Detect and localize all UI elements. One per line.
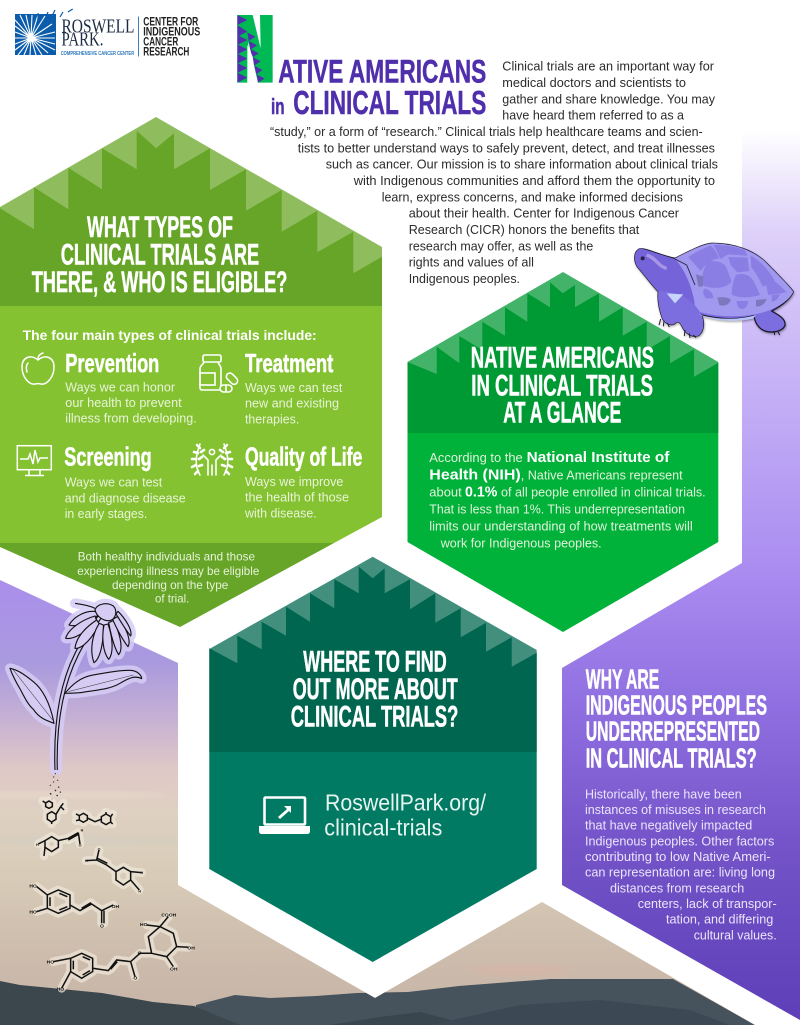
- treatment block: therapies.: [245, 411, 299, 426]
- logo: Roswell Park: [15, 9, 139, 57]
- text block: introduction: learn, express concerns, and make informed decisions: [382, 189, 683, 204]
- panel: sunset landscape photo: [0, 580, 755, 1025]
- icon: sunburst: [15, 9, 73, 55]
- treatment block: [245, 348, 343, 426]
- illustration: molecules: OH: [112, 904, 120, 910]
- body text: National Institute of: [527, 449, 670, 466]
- body text: , Native Americans represent: [521, 467, 683, 482]
- screening block: in early stages.: [65, 506, 147, 521]
- text block: introduction: about their health. Center for Indigenous Cancer: [409, 206, 680, 221]
- heading: [471, 342, 654, 430]
- heading: NATIVE AMERICANS: [471, 342, 654, 375]
- body text: [429, 449, 706, 551]
- heading: CLINICAL TRIALS ARE: [61, 238, 259, 272]
- illustration: molecules: HO: [29, 884, 37, 890]
- illustration: molecules: O: [138, 951, 142, 957]
- title: [271, 53, 486, 122]
- text block: introduction: such as cancer. Our mission is to share information about clinical trials: [326, 157, 718, 172]
- illustration: molecules: OH: [187, 945, 195, 951]
- heading: CLINICAL TRIALS?: [291, 701, 458, 734]
- heading: why underrepresented: [586, 663, 767, 773]
- panel: at a glance: [408, 272, 718, 632]
- illustration: molecules: H: [81, 828, 84, 832]
- title: in: [271, 94, 284, 119]
- illustration: molecules: O: [133, 975, 137, 981]
- text block: introduction: medical doctors and scientists to: [502, 75, 686, 90]
- icon: laptop: [259, 798, 310, 834]
- illustration: molecules: O: [79, 844, 82, 848]
- heading: THERE, & WHO IS ELIGIBLE?: [32, 266, 287, 299]
- text block: introduction: [270, 59, 718, 286]
- illustration: molecules: HO: [140, 922, 148, 928]
- eligibility note: of trial.: [155, 592, 189, 606]
- illustration: molecules: OH: [170, 967, 178, 973]
- illustration: molecules: H: [141, 871, 144, 875]
- prevention block: Prevention: [65, 348, 159, 378]
- body text: about: [429, 485, 462, 500]
- title: CLINICAL TRIALS: [293, 85, 486, 122]
- screening block: and diagnose disease: [65, 490, 186, 505]
- illustration: coneflower: [10, 603, 142, 799]
- text block: why underrepresented: contributing to low Native Ameri-: [585, 849, 771, 864]
- body text: limits our understanding of how treatments will: [429, 519, 693, 534]
- heading: IN CLINICAL TRIALS: [471, 369, 653, 402]
- logo text: Center for Indigenous Cancer Research: CANCER: [143, 36, 179, 48]
- link text: clinical-trials: [324, 815, 442, 841]
- panel: types of clinical trials: [0, 117, 382, 627]
- icon: heart monitor: [17, 446, 51, 476]
- heading: AT A GLANCE: [503, 397, 621, 430]
- illustration: molecules: COOH: [161, 913, 177, 919]
- illustration: turtle: [635, 243, 793, 338]
- heading: why underrepresented: WHY ARE: [586, 663, 659, 694]
- text block: why underrepresented: instances of misuses in research: [585, 802, 766, 817]
- text block: why underrepresented: can representation are: living long: [585, 865, 775, 880]
- treatment block: new and existing: [245, 396, 339, 411]
- quality of life block: Quality of Life: [245, 442, 362, 472]
- illustration: molecules: HO: [57, 987, 64, 993]
- panel: where to find out more: [209, 557, 537, 962]
- eligibility note: depending on the type: [112, 578, 229, 592]
- illustration: molecules: O: [100, 923, 104, 929]
- quality of life block: [244, 442, 362, 520]
- body text: of all people enrolled in clinical trials.: [501, 485, 706, 500]
- logo text: Center for Indigenous Cancer Research: CENTER FOR: [143, 16, 199, 28]
- title: ATIVE AMERICANS: [278, 53, 486, 89]
- logo: Roswell Park: PARK.: [62, 28, 104, 50]
- text block: introduction: Clinical trials are an important way for: [502, 59, 715, 74]
- illustration: molecules: HO: [47, 959, 54, 965]
- text block: why underrepresented: [585, 786, 777, 942]
- quality of life block: with disease.: [244, 505, 317, 520]
- text block: introduction: “study,” or a form of “research.” Clinical trials help healthcare teams and scien-: [270, 124, 703, 139]
- panel: purple hexagon background: [562, 130, 800, 1020]
- screening block: Screening: [64, 442, 152, 472]
- logo: Roswell Park: ROSWELL: [62, 16, 134, 38]
- text block: introduction: research may offer, as well as the: [409, 238, 593, 253]
- eligibility note: [77, 550, 260, 606]
- illustration: molecules: H: [36, 843, 39, 847]
- logo: Roswell Park: COMPREHENSIVE CANCER CENTER: [61, 51, 134, 57]
- logo text: Center for Indigenous Cancer Research: RESEARCH: [143, 46, 189, 58]
- subheading: The four main types of clinical trials include:: [23, 327, 317, 343]
- text block: introduction: gather and share knowledge. You may: [502, 91, 715, 106]
- heading: [32, 211, 287, 299]
- text block: introduction: Indigenous peoples.: [409, 271, 520, 286]
- icon: person with laurels: [192, 444, 232, 475]
- link text: [324, 790, 487, 841]
- eligibility note: experiencing illness may be eligible: [77, 564, 260, 578]
- prevention block: our health to prevent: [65, 395, 182, 410]
- heading: WHAT TYPES OF: [87, 211, 233, 244]
- heading: OUT MORE ABOUT: [293, 673, 458, 706]
- icon: apple: [22, 353, 54, 384]
- text block: introduction: Research (CICR) honors the benefits that: [409, 222, 640, 237]
- treatment block: Ways we can test: [245, 380, 343, 395]
- text block: introduction: tists to better understand ways to safely prevent, detect, and treat illnesses: [298, 140, 715, 155]
- text block: why underrepresented: centers, lack of transpor-: [638, 896, 777, 911]
- heading: WHERE TO FIND: [303, 646, 447, 679]
- logo text: Center for Indigenous Cancer Research: INDIGENOUS: [143, 26, 201, 38]
- body text: According to the: [429, 450, 523, 465]
- text block: introduction: with Indigenous communities and afford them the opportunity to: [353, 173, 715, 188]
- illustration: molecules: HO: [29, 910, 37, 916]
- body text: That is less than 1%. This underrepresentation: [429, 502, 685, 517]
- text block: why underrepresented: Historically, there have been: [585, 786, 742, 801]
- screening block: Ways we can test: [65, 475, 163, 490]
- illustration: molecules: [29, 801, 195, 993]
- icon: pill bottle: [200, 355, 239, 392]
- text block: why underrepresented: tation, and differing: [666, 912, 773, 927]
- screening block: [64, 442, 186, 521]
- text block: why underrepresented: that have negatively impacted: [585, 818, 752, 833]
- body text: work for Indigenous peoples.: [440, 536, 602, 551]
- text block: why underrepresented: Indigenous peoples. Other factors: [585, 833, 775, 848]
- prevention block: Ways we can honor: [65, 379, 176, 394]
- quality of life block: Ways we improve: [245, 474, 343, 489]
- prevention block: illness from developing.: [65, 411, 197, 426]
- quality of life block: the health of those: [245, 490, 349, 505]
- body text: 0.1%: [465, 484, 497, 501]
- text block: introduction: have heard them referred to as a: [502, 108, 685, 123]
- body text: Health (NIH): [429, 466, 521, 483]
- text block: introduction: rights and values of all: [409, 255, 534, 270]
- link text: RoswellPark.org/: [325, 790, 487, 816]
- icon: patterned letter N: [237, 15, 273, 83]
- text block: why underrepresented: cultural values.: [694, 927, 777, 942]
- heading: [291, 646, 458, 734]
- illustration: molecules: O: [98, 848, 101, 852]
- illustration: molecules: H: [85, 859, 88, 863]
- prevention block: [65, 348, 197, 426]
- text block: why underrepresented: distances from research: [610, 880, 744, 895]
- eligibility note: Both healthy individuals and those: [78, 550, 255, 564]
- illustration: molecules: H: [138, 890, 141, 894]
- logo text: Center for Indigenous Cancer Research: [143, 16, 201, 58]
- treatment block: Treatment: [245, 348, 334, 378]
